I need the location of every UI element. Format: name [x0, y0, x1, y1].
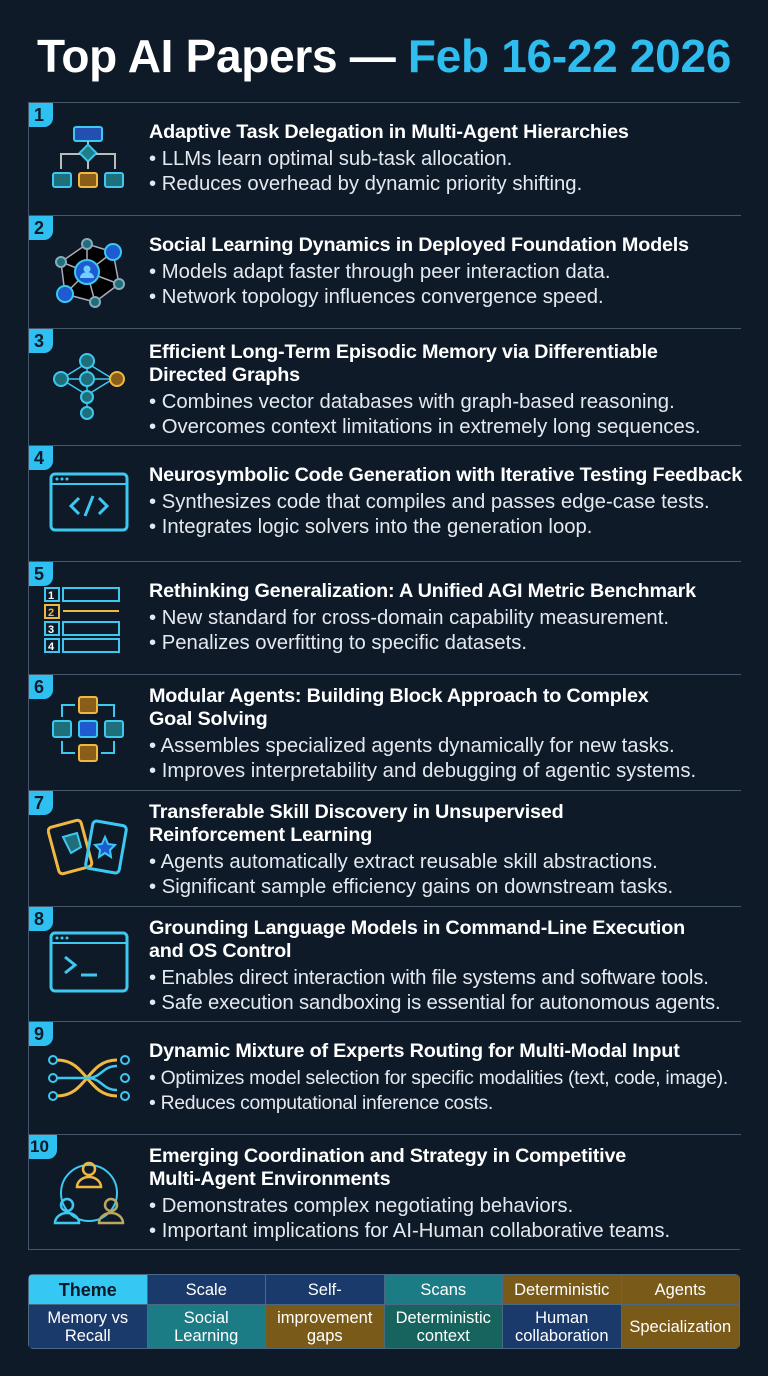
text 10: Emerging Coordination and Strategy in Competitive: [149, 1145, 626, 1167]
text 5: [149, 580, 696, 654]
text 10: • Demonstrates complex negotiating behaviors.: [149, 1195, 573, 1217]
theme table: context: [417, 1326, 470, 1344]
paper 1: [29, 103, 741, 216]
text 6: • Assembles specialized agents dynamically for new tasks.: [149, 735, 675, 757]
text 10: Multi-Agent Environments: [149, 1168, 390, 1190]
paper 5: [29, 562, 741, 675]
text 10: • Important implications for AI-Human collaborative teams.: [149, 1220, 670, 1242]
theme table: Specialization: [629, 1318, 731, 1336]
paper 4: [29, 446, 741, 562]
theme table: Learning: [174, 1326, 238, 1344]
text 8: • Enables direct interaction with file systems and software tools.: [149, 967, 709, 989]
text 7: Transferable Skill Discovery in Unsupervised: [149, 801, 563, 823]
theme table: collaboration: [515, 1326, 609, 1344]
theme table: Memory vs: [47, 1308, 128, 1326]
text 3: • Overcomes context limitations in extremely long sequences.: [149, 416, 701, 438]
paper 6: [29, 675, 741, 791]
theme table: [28, 1274, 740, 1349]
text 7: • Agents automatically extract reusable skill abstractions.: [149, 851, 658, 873]
text 1: • Reduces overhead by dynamic priority shifting.: [149, 173, 582, 195]
paper 4: 4: [34, 448, 44, 468]
icon: directed graph: [53, 353, 125, 420]
icon: ranked list: 4: [48, 641, 55, 653]
text 7: [149, 801, 673, 898]
theme table: Theme: [59, 1280, 117, 1300]
text 2: Social Learning Dynamics in Deployed Foundation Models: [149, 234, 689, 256]
text 1: [149, 121, 629, 195]
text 9: • Optimizes model selection for specific modalities (text, code, image).: [149, 1067, 728, 1089]
text 5: • New standard for cross-domain capability measurement.: [149, 607, 669, 629]
theme table: Social: [184, 1308, 229, 1326]
text 7: • Significant sample efficiency gains on downstream tasks.: [149, 876, 673, 898]
text 1: Adaptive Task Delegation in Multi-Agent Hierarchies: [149, 121, 629, 143]
icon: terminal: [50, 932, 128, 992]
icon: ranked list: 2: [48, 607, 54, 619]
text 6: [149, 685, 696, 782]
paper 8: [29, 907, 741, 1022]
text 8: and OS Control: [149, 940, 291, 962]
text 2: • Network topology influences convergence speed.: [149, 286, 604, 308]
text 9: [149, 1040, 728, 1114]
icon: code window: [50, 472, 128, 532]
text 9: • Reduces computational inference costs.: [149, 1092, 493, 1114]
theme table: Deterministic: [514, 1280, 609, 1298]
text 1: • LLMs learn optimal sub-task allocation.: [149, 148, 512, 170]
theme table: Recall: [65, 1326, 111, 1344]
icon: ranked list: 3: [48, 624, 54, 636]
text 8: [149, 917, 721, 1014]
paper 10: 10: [30, 1137, 49, 1156]
icon: ranked list: 1: [48, 590, 54, 602]
text 4: • Integrates logic solvers into the generation loop.: [149, 516, 592, 538]
icon: network: [55, 238, 125, 308]
paper 6: 6: [34, 677, 44, 697]
theme table: Scale: [186, 1280, 227, 1298]
icon: skill cards: [47, 818, 128, 876]
paper 3: 3: [34, 331, 44, 351]
paper 5: 5: [34, 564, 44, 584]
theme table: improvement: [277, 1308, 372, 1326]
text 10: [149, 1145, 670, 1242]
icon: routing: [48, 1055, 130, 1101]
text 4: Neurosymbolic Code Generation with Iterative Testing Feedback: [149, 464, 742, 486]
text 2: • Models adapt faster through peer interaction data.: [149, 261, 610, 283]
text 6: Modular Agents: Building Block Approach to Complex: [149, 685, 649, 707]
text 4: [149, 464, 742, 538]
icon: coordinating agents: [54, 1162, 124, 1224]
paper 2: 2: [34, 218, 44, 238]
text 5: Rethinking Generalization: A Unified AGI Metric Benchmark: [149, 580, 696, 602]
paper 7: [29, 791, 741, 907]
paper 8: 8: [34, 909, 44, 929]
paper 1: 1: [34, 105, 44, 125]
text 7: Reinforcement Learning: [149, 824, 372, 846]
text 6: Goal Solving: [149, 708, 268, 730]
icon: ranked list: [44, 587, 120, 653]
text 4: • Synthesizes code that compiles and passes edge-case tests.: [149, 491, 710, 513]
theme table: Deterministic: [396, 1308, 491, 1326]
theme table: Self-: [308, 1280, 342, 1298]
paper 7: 7: [34, 793, 44, 813]
paper 9: [29, 1022, 741, 1135]
text 3: • Combines vector databases with graph-based reasoning.: [149, 391, 675, 413]
text 8: • Safe execution sandboxing is essential for autonomous agents.: [149, 992, 721, 1014]
text 8: Grounding Language Models in Command-Line Execution: [149, 917, 685, 939]
text 3: Directed Graphs: [149, 364, 300, 386]
theme table: gaps: [307, 1326, 343, 1344]
text 9: Dynamic Mixture of Experts Routing for Multi-Modal Input: [149, 1040, 680, 1062]
text 3: Efficient Long-Term Episodic Memory via Differentiable: [149, 341, 658, 363]
title: Top AI Papers — Feb 16-22 2026: [37, 30, 731, 82]
paper 3: [29, 329, 741, 446]
icon: hierarchy: [52, 126, 124, 188]
paper 2: [29, 216, 741, 329]
paper 10: [29, 1135, 670, 1242]
paper list: [28, 102, 740, 1250]
text 3: [149, 341, 701, 438]
theme table: Human: [535, 1308, 588, 1326]
text 6: • Improves interpretability and debugging of agentic systems.: [149, 760, 696, 782]
icon: modular blocks: [52, 696, 124, 762]
theme table: Agents: [655, 1280, 706, 1298]
text 2: [149, 234, 689, 308]
paper 9: 9: [34, 1024, 44, 1044]
text 5: • Penalizes overfitting to specific datasets.: [149, 632, 527, 654]
theme table: Scans: [420, 1280, 466, 1298]
